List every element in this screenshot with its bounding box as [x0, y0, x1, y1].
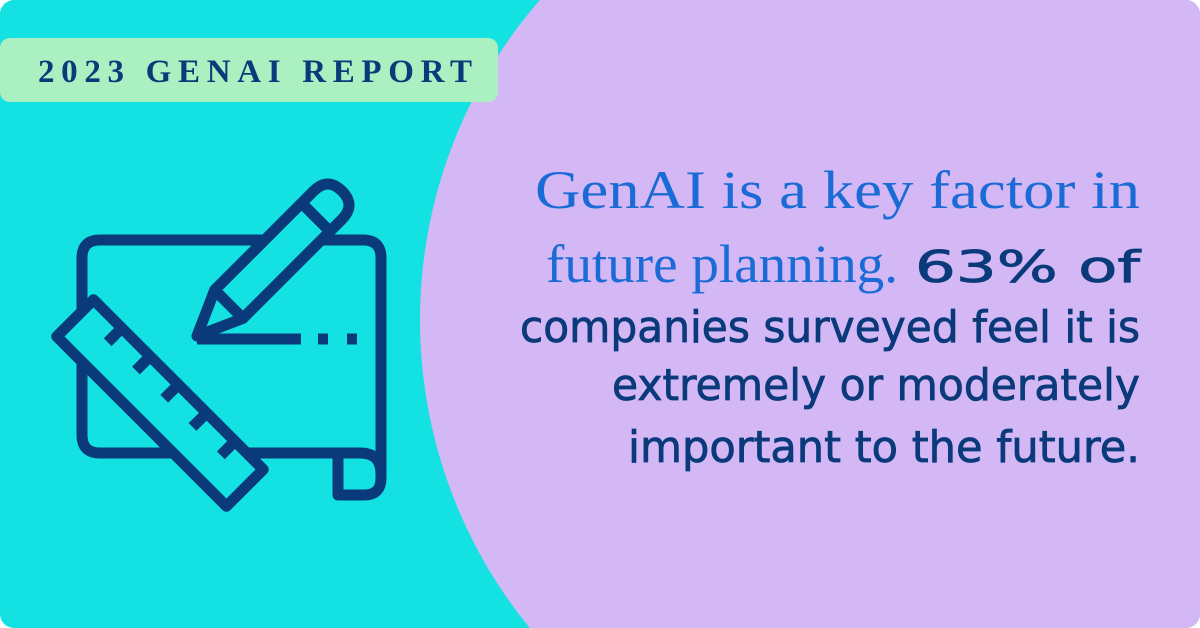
headline text: future planning.: [546, 234, 898, 294]
headline text: 63% of: [915, 242, 1142, 293]
badge: 2023 GENAI REPORT: [38, 54, 472, 90]
icon: sheet with pencil and ruler: [57, 177, 381, 506]
badge: [0, 38, 498, 102]
headline text: [520, 160, 1142, 473]
headline text: extremely or moderately: [612, 360, 1140, 411]
headline text: companies surveyed feel it is: [520, 302, 1140, 353]
headline text: important to the future.: [628, 422, 1140, 473]
headline text: GenAI is a key factor in: [535, 160, 1140, 220]
